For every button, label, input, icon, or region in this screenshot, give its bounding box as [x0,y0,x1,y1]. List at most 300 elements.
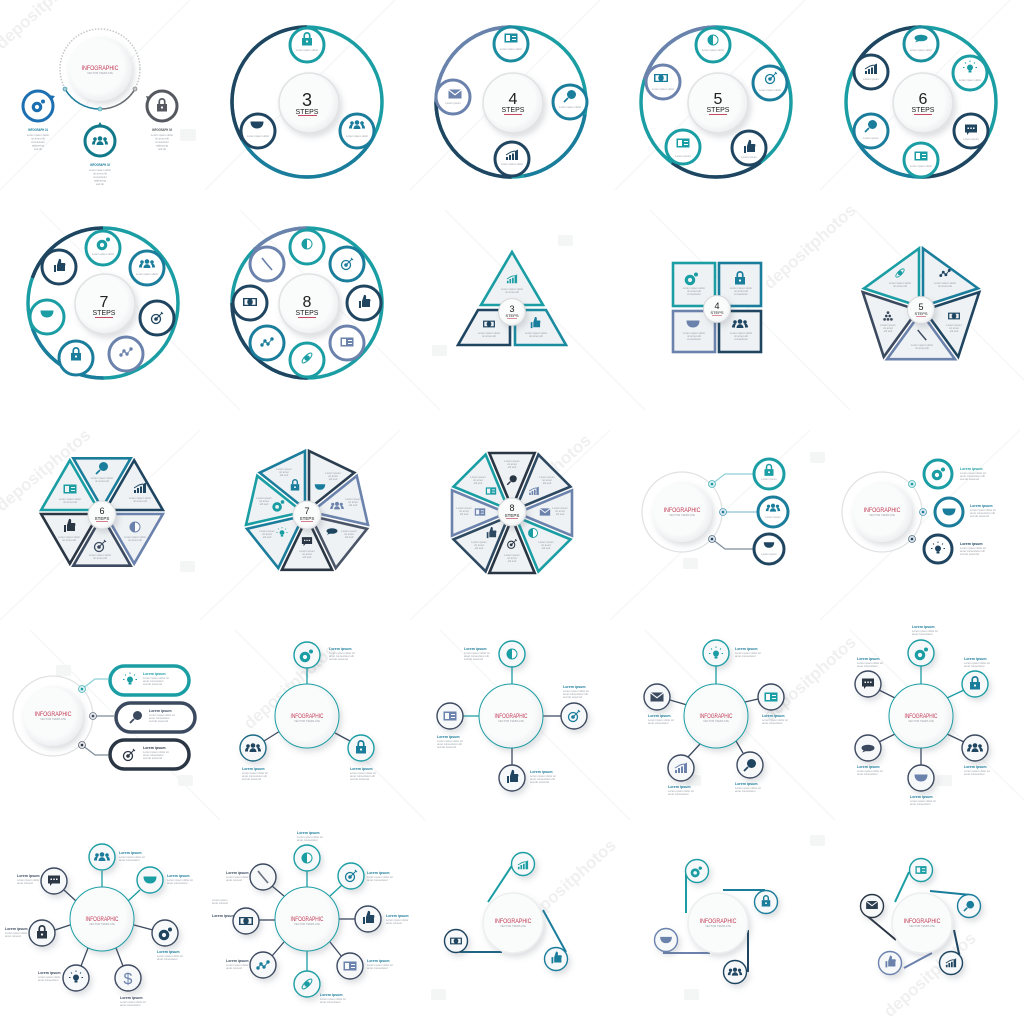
node: thumb [544,948,568,970]
wedge: mag: sit amet [507,462,517,466]
wedge: mag [489,453,535,508]
node: contrast: Lorem ipsum dolor [702,48,724,52]
hub [479,684,543,748]
node: people [89,844,145,870]
center label [498,298,526,326]
node: card: Lorem ipsum dolor [500,47,522,51]
panel: ring with 7 steps [7,207,199,399]
node: bowl: Lorem ipsum dolor sit [970,509,996,512]
node: gear: sed do eiusmod [960,477,979,481]
hub circle with title: INFOGRAPHIC [82,65,119,72]
tangent lines [663,873,765,972]
node: people [340,114,374,148]
block: bowl: Lorem ipsum dolor [683,332,705,335]
wedge: chart [500,455,570,525]
wedge: bubble: Lorem ipsum [341,530,357,533]
node: thumb [347,286,381,320]
node: target [140,301,174,335]
wedge: chat: elit sed [303,555,312,559]
wedge: gear: sit amet [259,499,269,503]
panel: ring with 8 steps [201,197,413,409]
node: chart [940,952,962,974]
node: chart: Lorem ipsum dolor [501,162,523,166]
wedge: contrast: sit amet [541,543,551,547]
node: atom [290,343,324,377]
node: chat [855,657,883,697]
node: gear [152,920,183,961]
wedge: bowl: elit sed [329,477,338,481]
node: bubble [855,735,883,776]
connectors [78,679,114,755]
wedge: bulb [247,496,319,568]
wedge: lock: Lorem ipsum [276,468,292,471]
wedge: card chart: sit amet [459,509,469,513]
node: target: Lorem ipsum [563,685,586,689]
wedge: lock [260,451,328,520]
wedge: card [454,455,524,525]
node: bulb: Lorem ipsum dolor [959,78,981,82]
node: lock [290,28,324,62]
node: mail [644,684,674,725]
wedge: people [306,476,368,536]
node: infograph 02: Lorem ipsum dolor [89,169,111,172]
hub [684,684,748,748]
wedge: chart: elit sed [543,481,552,485]
node: atom: Lorem ipsum [320,993,343,997]
node: atom: Lorem ipsum dolor sit [320,998,346,1001]
block: lock: consectetur [734,292,748,296]
wedge: card [41,460,113,535]
node: gear: Lorem ipsum dolor sit [329,652,355,655]
connectors [259,871,355,971]
node: chart: amet consectetur [668,792,689,796]
wedge: bulb: elit sed [263,535,272,539]
wedge: bulb: sit amet [262,532,272,536]
panel: network hub with 3 nodes [240,642,376,781]
block: people [719,311,761,352]
node: bowl: Lorem ipsum [970,504,993,508]
node: dots [226,952,276,978]
node: people [724,960,746,984]
hub [275,684,339,748]
node: chat: amet consectetur [857,664,878,668]
node: gear [294,642,355,668]
node: contrast: amet consectetur [297,838,318,842]
node: bowl: amet consectetur [910,802,931,806]
node: chart: Lorem ipsum [367,959,390,963]
node: people [962,735,990,776]
node: thumb: amet consect [386,921,402,925]
center label [704,296,730,322]
hub: INFOGRAPHIC [904,713,938,720]
wedge: money: Lorem ipsum [946,324,962,327]
center label [483,73,543,133]
wedge: pyramid: sit amet [883,326,893,330]
node: money: Lorem ipsum dolor [652,87,674,91]
center label: 8 [303,294,312,311]
panel: ring with 3 steps [205,0,409,204]
node: mail: Lorem ipsum dolor sit [648,719,674,722]
wedge: lock: elit sed [280,473,289,477]
node: people: sed do eiusmod [242,777,261,781]
wedge: card: elit sed [474,481,483,485]
hub: INFOGRAPHIC [86,916,119,923]
wedge: chart: Lorem ipsum dolor [129,497,151,500]
wedge: money [914,278,979,357]
wedge: bowl: sit amet [328,474,338,478]
node: infograph 03: sed do [158,147,167,151]
wedge: dots [895,248,978,326]
node: people: Lorem ipsum dolor sit [964,770,990,773]
node: bowl: sed do eiusmod [970,514,989,518]
wedge: chat: Lorem ipsum [299,550,315,553]
node: infograph 02: adipiscing [94,178,106,182]
node: bowl: Lorem ipsum dolor [247,134,269,138]
node: bowl: Lorem ipsum [167,874,190,878]
wedge: card chart [452,490,507,536]
panel: network hub with 8 nodes [212,831,409,1004]
block: bowl: consectetur [687,337,701,341]
wedge: mail: Lorem ipsum [552,507,568,510]
node: chart: amet consectetur [367,966,388,970]
node: atom [294,971,346,1004]
wedge: mag: Lorem ipsum dolor [91,477,113,480]
wedge: money: elit sed [950,329,959,333]
wedge: target [489,518,535,573]
hub: VECTOR TEMPLATE [909,924,935,928]
center label: STEPS [502,107,525,114]
hub circle with title [13,676,93,756]
wedge: mag: sit amet elit [95,479,109,483]
node: infograph 01: sed do [34,147,43,151]
text: depositphotos [520,835,620,928]
wedge: target: Lorem ipsum [504,554,520,557]
node: chart: Lorem ipsum [863,77,880,81]
wedge: thumb: Lorem ipsum dolor [525,332,547,335]
wedge: thumb: elit sed [475,546,484,550]
hub: INFOGRAPHIC [494,918,532,925]
panel: tangent hub with 4 nodes [654,860,778,984]
node: gear [908,625,938,666]
node: mag [958,894,980,918]
hub: VECTOR TEMPLATE [294,719,320,723]
node: mail: Lorem ipsum [648,714,671,718]
block: people: Lorem ipsum dolor [730,332,752,335]
wedge: lock: sit amet [279,470,289,474]
node: mag: amet consectetur [735,789,756,793]
node: lock: Lorem ipsum dolor sit [350,772,376,775]
node: chat: Lorem ipsum [857,657,880,661]
node: mag [735,752,763,793]
node: money: amet consect [212,901,228,905]
wedge: contrast [500,501,570,571]
wedge: mail [517,490,572,536]
wedge: chart: sit amet elit [505,290,519,294]
hub: VECTOR TEMPLATE [89,922,115,926]
hub circle with title: VECTOR TEMPLATE [669,513,695,517]
node: mail: amet consectetur [648,721,669,725]
wedge: thumb [454,501,524,571]
node: mag: Lorem ipsum dolor [559,105,581,109]
wedge: pyramid: elit sed [884,329,893,333]
hub: VECTOR TEMPLATE [705,924,731,928]
wedge: wrench: sit amet elit [915,346,929,350]
wedge: card chart: Lorem ipsum [456,507,472,510]
node: chat: Lorem ipsum dolor sit [857,662,883,665]
node: infograph 01 [23,91,55,151]
wedge: pyramid [863,278,928,357]
node: chat: Lorem ipsum dolor [17,879,39,882]
node: contrast: Lorem ipsum dolor sit [464,652,490,655]
node: people: amet consectetur elit [242,774,267,778]
connectors [55,871,153,966]
wedge: contrast: elit sed [542,546,551,550]
node: lock: Lorem ipsum dolor [296,48,318,52]
center label: 3 [302,90,312,110]
connectors [670,666,758,757]
node: chat: Lorem ipsum [17,874,40,878]
node: bowl: amet consectetur elit [970,511,995,515]
wedge: card: sit amet [473,478,483,482]
hub [892,893,952,953]
wedge: chart: sit amet [542,478,552,482]
wedge: contrast: Lorem ipsum dolor [124,536,146,539]
node: infograph 01: INFOGRAPH 01 [28,128,48,132]
center label: STEPS [505,513,519,518]
outer ring [7,207,199,399]
node: bubble: amet consectetur [857,772,878,776]
wedge: thumb: Lorem ipsum [471,541,487,544]
hub: VECTOR TEMPLATE [498,719,524,723]
wedge: chat: sit amet [302,552,312,556]
text: depositphotos [240,640,340,733]
center label: 6 [99,506,105,516]
node: dots: amet consect [226,966,242,970]
center label: STEPS [914,311,928,316]
node: wrench: Lorem ipsum [226,871,249,875]
node: lock: amet consect [5,934,21,938]
node: wrench: amet consect [226,878,242,882]
node: money [444,930,468,952]
node: lock: amet consectetur [964,664,985,668]
center label [75,274,135,334]
panel: ring with 4 steps [424,15,598,189]
node: thumb: sed do eiusmod [530,780,549,784]
node: contrast: amet consectetur elit [464,654,489,658]
node: gear: Lorem ipsum [912,625,935,629]
node: chart [495,142,529,176]
node: bowl [241,114,275,148]
node: chat [954,114,988,148]
node: infograph 03: adipiscing [156,144,168,148]
node: bubble: Lorem ipsum [857,765,880,769]
node: bowl [137,867,193,893]
node: bowl: Lorem ipsum dolor sit [167,879,193,882]
node: chart: Lorem ipsum [668,785,691,789]
outer ring [424,15,598,189]
node: card: Lorem ipsum dolor [910,164,932,168]
node: target: amet consectetur elit [563,692,588,696]
hub [688,893,748,953]
node: card [758,684,788,725]
block: lock: Lorem ipsum dolor [730,287,752,290]
node: contrast: Lorem ipsum [464,647,487,651]
node: bulb: Lorem ipsum [38,971,61,975]
node: mag: Lorem ipsum dolor sit [735,787,761,790]
node: lock [5,920,55,946]
node: money [233,286,267,320]
node: people: Lorem ipsum [964,765,987,769]
node: lock [348,735,376,781]
node: lock: Lorem ipsum dolor sit [964,662,990,665]
pill: bulb [110,666,189,695]
node: people: amet consectetur [119,858,140,862]
node: contrast [294,831,323,871]
node: bulb: sed do eiusmod [960,552,979,556]
node: contrast: sed do eiusmod [464,657,483,661]
pill: bulb: Lorem ipsum dolor sit [143,677,169,680]
wedge: thumb [41,489,113,564]
panel: hub with three pills [13,666,195,769]
node: target [330,247,364,281]
node: infograph 03: sit amet elit [155,136,169,140]
wedge: mag [73,458,131,508]
node: mag: Lorem ipsum [735,782,758,786]
wedge: target [73,516,131,566]
center label [88,501,116,529]
node: bowl: Lorem ipsum [761,552,778,556]
panel: tangent hub with 3 nodes [444,852,568,970]
wedge: pyramid: Lorem ipsum [880,324,896,327]
wedge: chart: Lorem ipsum dolor [501,288,523,291]
center label: STEPS [505,313,519,318]
node: target: sed do eiusmod [563,695,582,699]
wedge: target: sit amet elit [93,556,107,560]
node: gear [686,860,708,882]
panel: network hub with 4 nodes [437,641,589,791]
node: card [910,858,932,882]
panel: octagon 8 steps [452,453,572,573]
block: bowl: sit amet elit [687,334,701,338]
hub: VECTOR TEMPLATE [500,924,526,928]
panel: hub with three labelled nodes [842,460,996,563]
node: infograph 03: Lorem ipsum dolor [151,134,173,137]
wedge: gear [246,476,308,536]
wedge: bubble [295,496,367,568]
pill: target: Lorem ipsum [143,746,166,750]
block: lock [719,263,761,306]
pill: target: amet consectetur [143,753,164,757]
panel: network hub with 6 nodes [855,625,990,806]
pill: target: sed do eiusmod [143,756,162,760]
node: gear: amet consectetur [912,632,933,636]
node: bowl [935,498,996,526]
wedge: card: sit amet elit [63,500,77,504]
wedge: card: Lorem ipsum dolor [59,498,81,501]
wedge: chart: Lorem ipsum [539,476,555,479]
pill: mag: sed do eiusmod [149,719,168,723]
center label: 3 [509,304,515,314]
connectors [463,667,561,765]
node: chart: Lorem ipsum [437,735,460,739]
node: dollar: amet consectetur [120,1003,141,1007]
node: dollar [115,965,146,1007]
center label: STEPS [93,310,116,317]
wedge: people: Lorem ipsum [345,498,361,501]
wedge: dots: sit amet elit [938,284,952,288]
panel: network hub with 5 nodes [644,640,788,796]
pill: target [110,740,189,769]
center label [498,498,526,526]
hub circle with title [60,29,140,109]
node: money: Lorem ipsum [212,914,235,918]
node: lock [59,341,93,375]
panel: pentagon 5 steps [863,248,979,359]
center label: STEPS [95,516,109,521]
wedge: money: sit amet [949,326,959,330]
node: dots [250,326,284,360]
wedge: chat [282,518,332,570]
node: mag [553,85,587,119]
wedge: money [458,310,510,345]
wedge: chart: sit amet elit [133,499,147,503]
panel: hexagon 6 steps [41,458,163,566]
node: thumb: amet consectetur elit [530,777,555,781]
node: gear: Lorem ipsum [157,950,180,954]
block: lock: sit amet elit [734,289,748,293]
node: chart bars [666,130,700,164]
panel: ring with 6 steps [819,0,1023,204]
hub: INFOGRAPHIC [290,916,324,923]
pill: target: Lorem ipsum dolor sit [143,751,169,754]
node: mag: Lorem ipsum [863,136,880,140]
text: depositphotos [760,632,860,725]
node: chart bars: Lorem ipsum [675,154,692,158]
node: people: Lorem ipsum dolor sit [242,772,268,775]
node: bubble [904,27,938,61]
node: infograph 02: INFOGRAPH 02 [90,163,110,167]
node: mail [436,80,470,114]
hub circle with title: VECTOR TEMPLATE [40,717,66,721]
block: gear: sit amet elit [687,289,701,293]
hub: INFOGRAPHIC [494,713,528,720]
node: money [646,65,680,99]
hub [70,887,134,951]
block: people: sit amet elit [734,334,748,338]
arc connector [63,87,137,111]
center label: STEPS [296,109,319,116]
wedge: contrast: Lorem ipsum [538,541,554,544]
node: bulb: Lorem ipsum dolor sit [735,652,761,655]
wedge: money: sit amet elit [482,334,496,338]
wedge: bowl [286,451,354,520]
node: people: Lorem ipsum [119,851,142,855]
panel: heptagon 7 steps [246,451,368,570]
node: thumb: Lorem ipsum dolor [386,919,408,922]
node: gear: Lorem ipsum [329,647,352,651]
node: gear: amet consectetur elit [329,654,354,658]
node: bulb: amet consectetur elit [960,549,985,553]
wedge: gear: Lorem ipsum [256,497,272,500]
center label [279,274,339,334]
center label [908,296,934,324]
node: card: Lorem ipsum [762,714,785,718]
node: people [240,735,268,781]
node: people: Lorem ipsum dolor [346,134,368,138]
wedge: thumb: sit amet [474,543,484,547]
wedge: gear: elit sed [260,502,269,506]
node: gear: Lorem ipsum dolor sit [960,472,986,475]
